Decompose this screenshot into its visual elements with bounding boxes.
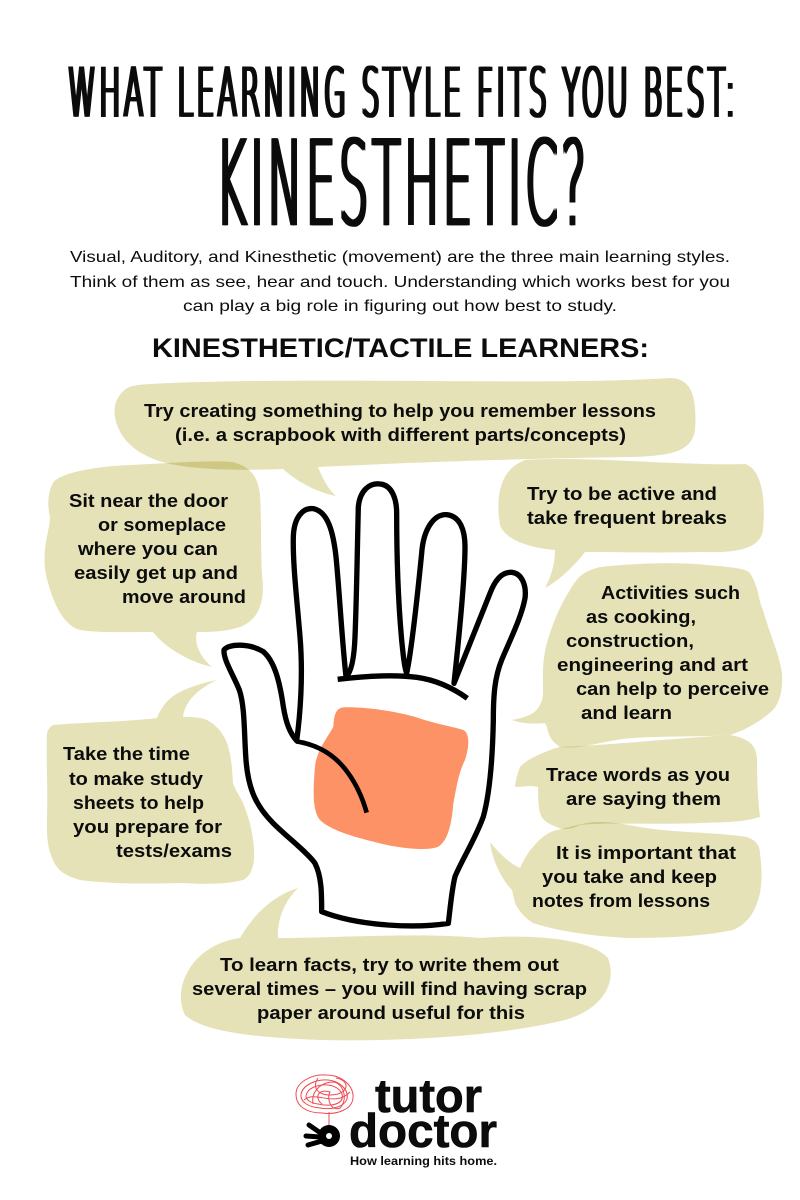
title line 1: WHAT LEARNING STYLE FITS YOU BEST: <box>68 55 735 133</box>
speech bubble: sit near the door: Sit near the door <box>69 491 228 511</box>
speech bubble: create something: Try creating something to help you remember lessons <box>144 401 656 421</box>
speech bubble: study sheets <box>47 680 254 884</box>
speech bubble: study sheets: Take the time <box>63 744 190 764</box>
palm crease <box>338 676 467 698</box>
speech bubble: keep notes: It is important that <box>556 843 736 863</box>
speech bubble: be active: Try to be active and <box>527 484 717 504</box>
speech bubble: sit near the door: where you can <box>77 539 218 559</box>
logo hand <box>306 1125 340 1147</box>
speech bubble: sit near the door <box>44 461 263 667</box>
hand outline <box>224 484 525 926</box>
speech bubble: activities: and learn <box>581 703 672 723</box>
speech bubble: be active <box>498 459 764 588</box>
speech bubble: trace words: are saying them <box>566 789 721 809</box>
palm patch <box>314 707 468 849</box>
intro paragraph: Visual, Auditory, and Kinesthetic (movement) are the three main learning styles. <box>70 249 730 266</box>
logo brain scribble <box>296 1075 353 1127</box>
intro paragraph: can play a big role in figuring out how best to study. <box>183 298 617 315</box>
speech bubble: trace words <box>515 735 760 829</box>
speech bubble: activities: can help to perceive <box>576 679 769 699</box>
speech bubble: learn facts: several times – you will find having scrap <box>192 979 587 999</box>
hand illustration <box>224 484 525 926</box>
logo <box>296 1069 497 1168</box>
speech bubble: study sheets: sheets to help <box>73 793 204 813</box>
life line <box>296 741 367 813</box>
speech bubble: activities: construction, <box>566 631 694 651</box>
speech bubble: be active: take frequent breaks <box>527 508 727 528</box>
speech bubble: learn facts: paper around useful for this <box>257 1003 525 1023</box>
intro paragraph <box>70 249 730 315</box>
speech bubble: create something <box>115 378 695 496</box>
speech bubble: keep notes <box>490 822 762 938</box>
logo wordmark: tutor <box>375 1069 482 1122</box>
speech bubble: keep notes: notes from lessons <box>532 891 710 911</box>
speech bubble: study sheets: tests/exams <box>116 841 232 861</box>
section heading: KINESTHETIC/TACTILE LEARNERS: <box>152 333 649 363</box>
speech bubble: learn facts: To learn facts, try to write them out <box>220 955 559 975</box>
speech bubble: trace words: Trace words as you <box>546 765 730 785</box>
speech bubble: keep notes: you take and keep <box>542 867 717 887</box>
title <box>68 55 735 252</box>
logo: doctor <box>349 1104 497 1157</box>
speech bubble: sit near the door: or someplace <box>98 515 226 535</box>
speech bubble: activities: as cooking, <box>586 607 696 627</box>
logo tagline: How learning hits home. <box>350 1156 497 1168</box>
speech bubble: study sheets: to make study <box>69 769 203 789</box>
speech bubble: activities: Activities such <box>601 583 740 603</box>
speech bubble: sit near the door: move around <box>122 587 246 607</box>
speech bubble: activities <box>512 563 782 748</box>
intro paragraph: Think of them as see, hear and touch. Understanding which works best for you <box>70 274 730 291</box>
title line 2: KINESTHETIC? <box>216 116 586 252</box>
speech bubble: create something: (i.e. a scrapbook with different parts/concepts) <box>175 425 626 445</box>
speech bubble: learn facts <box>181 888 611 1040</box>
speech bubble: study sheets: you prepare for <box>73 817 222 837</box>
speech bubble: activities: engineering and art <box>557 655 748 675</box>
speech bubble: sit near the door: easily get up and <box>74 563 238 583</box>
